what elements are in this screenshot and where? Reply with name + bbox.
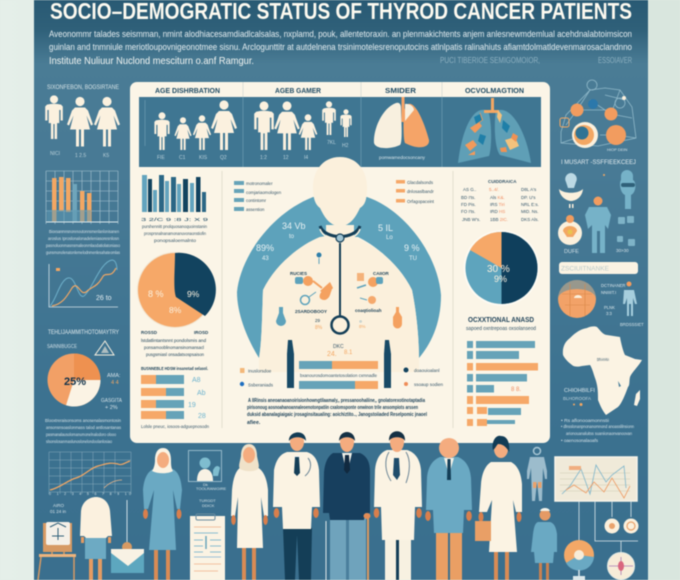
lower body legends: ssoaup sodien	[414, 382, 444, 387]
right column: map labels: • oaenosonalaoafs	[561, 438, 599, 443]
person: hijab woman in cream	[231, 444, 268, 580]
stacked horizontal bars: 28	[198, 413, 206, 420]
teal icon strip	[139, 97, 541, 167]
left column: line chart: 26 to	[96, 295, 112, 302]
panel column headings	[155, 82, 524, 97]
lower body legends: Inuslorsdoe	[248, 368, 272, 374]
occupation table: IRS Tiri	[490, 202, 505, 207]
lower body stacked bars: 8.1	[344, 350, 353, 356]
body caption	[247, 398, 427, 426]
left column: pie caption	[45, 418, 122, 444]
portrait box: TOOLRANIGIRE	[196, 486, 226, 491]
occupation table: DKS Als.	[521, 217, 539, 222]
age pie caption	[141, 330, 209, 371]
occupational analysis: 8 8.	[511, 387, 521, 393]
left column: pie caption: slsonslosanmaslunoslonelondoolanlosiao	[46, 439, 112, 444]
lower body stacked bars: bxanourosdomoantetosolation cxmnadle	[300, 373, 378, 378]
age icons: 7KL	[327, 140, 336, 146]
left column: caption: pasnoluonmasnsmaleonmlaodatiolatoniaso	[46, 243, 120, 248]
occupation table	[461, 179, 539, 222]
bottom left: chair with monitor: 01 24 in	[50, 509, 67, 514]
occupation table: AS G..	[463, 187, 476, 192]
left column: grid bar chart	[46, 171, 118, 224]
shoulder percentages: 9 %	[404, 243, 420, 253]
left column: pie section heading: SAINNIBUGCE	[47, 344, 77, 350]
body legends top: dnlosaslbandr	[407, 189, 434, 194]
left column: caption: gunsmonolenatonlemelodnmenlesahateomlas	[46, 250, 121, 255]
body legends top: contintomr	[246, 198, 267, 203]
right column: orange globe: NNIIIIT.I	[601, 290, 616, 295]
age chart caption: ponopsaloemalnto	[154, 238, 197, 243]
occupation table: CUIDDRAICA	[488, 179, 517, 184]
occupation table: JNB W's.	[462, 217, 480, 222]
right column: heading: I MUSART -SSFFIEEKCEEJ	[561, 159, 636, 166]
shoulder percentages: 89%	[256, 243, 274, 253]
right column: icon figures: 30>30	[616, 248, 629, 253]
stacked horizontal bars: A8	[192, 377, 201, 384]
intro text: ESSOIAVER	[598, 56, 632, 65]
bottom left: chair with monitor: AIRO	[53, 503, 65, 508]
organ diagram: 2SARDOBOOY	[295, 309, 327, 314]
right column: orange globe: 3:3	[606, 311, 612, 316]
column dividers	[222, 171, 453, 428]
age pie chart: 8%	[169, 305, 182, 315]
lower body stacked bars: 24.	[327, 351, 337, 358]
occupation table: DP. U's	[521, 195, 536, 200]
body caption: duksid abanalagiaigaic jrosaginsitaualing: aoichiztito.., Janogstoiiaded Reselpomic jnaoel	[247, 412, 427, 418]
right column: map labels: • dlnsslonanpnonanomnond anoasslilnsionn	[561, 424, 634, 429]
occupation table: Als K&.	[490, 195, 505, 200]
age icons: H2	[342, 143, 349, 149]
organ diagram	[276, 252, 402, 331]
torso	[259, 225, 419, 372]
person: man in navy suit	[323, 432, 370, 580]
right column: map labels: arionouanaluitss suaniionaonvanoovan	[566, 431, 632, 436]
left column: pie section heading	[47, 329, 120, 355]
right column: map labels: CHIOHBILFI	[564, 388, 595, 394]
left column: pie legend: 4 4	[111, 380, 119, 386]
lower body legends	[240, 368, 444, 388]
right column: map labels: • Rs aflonooamonnstii	[561, 418, 609, 423]
person: bald man in blue coat	[425, 438, 472, 580]
left column: pie legend: AMA:	[107, 373, 121, 379]
stacked horizontal bars: Ab	[197, 390, 206, 397]
right column: icon figures	[558, 170, 635, 255]
person: woman with bag	[475, 436, 522, 580]
occupation pie chart: 9%	[494, 274, 507, 284]
right column: map labels	[561, 388, 634, 443]
occupation pie chart: 30 %	[487, 264, 510, 275]
left column: pie legend: + 2%	[105, 405, 118, 411]
portrait box: DDICK	[202, 503, 215, 508]
right column: orange globe: PLNK	[604, 305, 615, 310]
left column: pie section heading: TEHLIJAAMMITHOTOMAYTRY	[48, 329, 120, 336]
bottom left: line chart	[49, 452, 131, 496]
shoulders	[237, 197, 441, 358]
person: doctor	[273, 432, 320, 580]
left column: pie caption: pasmanalausolomanumonelnalodoro olooo	[46, 432, 116, 437]
occupation table: FO I'ts.	[461, 209, 475, 214]
left column: pie caption: Blooxtreraisonsoms anosenalasmontosin	[45, 418, 121, 423]
occupation table: FD Pis.	[461, 202, 476, 207]
left column: pie chart: 25%	[64, 376, 86, 388]
portrait box: Dk	[203, 482, 208, 487]
occupation table: IRD HS	[490, 209, 505, 214]
central cream panel	[38, 80, 644, 580]
age icons: 1:2	[260, 155, 267, 161]
age chart caption: prosprsnalnanamonanuvonaonstiofin	[144, 231, 207, 236]
age icons: FIE	[157, 155, 165, 161]
age chart caption	[142, 224, 208, 243]
body legends top: assention	[246, 207, 265, 212]
body legends top: Glacdalsonds	[407, 180, 433, 185]
intro text: Institute Nuliuur Nuclond mesciturn o.anf Ramgur.	[49, 55, 254, 67]
lower body legends: Ssberaniads	[248, 382, 274, 388]
shoulder percentages: TU	[409, 256, 417, 262]
body legends top: comjariaomologen	[246, 190, 282, 195]
age icons: 12	[283, 155, 289, 161]
age pie caption: BUSNNEBLE HDSM insanotad selasol.	[141, 366, 208, 371]
occupation table: BD I'ts.	[461, 195, 475, 200]
age bar chart	[141, 175, 209, 223]
left column: caption: Bioxsanmnsnorenoutonnsmenlanlonisanen	[49, 229, 119, 234]
gender lungs	[374, 97, 429, 160]
bottom left: chair with monitor	[38, 503, 76, 580]
portrait box: TURGDT	[199, 498, 216, 503]
body caption: A IIRinsis aneoanaoanoirisionhowngtilaamaly,, pressanoohaliine,, gnolatorexotinotaptadia	[248, 398, 425, 404]
left column: sex distribution: NICI	[50, 151, 60, 157]
panel column headings: AGE DISHRBATION	[155, 86, 220, 95]
lower body stacked bars	[299, 344, 378, 389]
age icons	[154, 100, 352, 161]
left column: line chart	[49, 260, 118, 307]
organ diagram: 29	[315, 318, 321, 323]
small bottles	[287, 340, 391, 388]
shoulder percentages: 34 Vb	[282, 221, 306, 231]
stacked horizontal bars: 19	[188, 402, 196, 409]
body legends top	[234, 180, 435, 212]
occupational analysis: OCXXTIONAL ANASD	[468, 317, 534, 324]
age pie caption: pusgsmiasl onsadatsospsaison	[146, 352, 204, 357]
shoulder percentages: 5 IL	[378, 223, 393, 233]
shoulder percentages	[256, 221, 420, 262]
age icons: Q2	[220, 155, 227, 161]
panel column headings: SMIDER	[385, 86, 417, 95]
age chart caption: purshennitt pnolquosanoquoinstanin	[142, 224, 208, 229]
left column: caption: aroslus Iproslonalonadeleniasoresnlosn	[48, 236, 119, 241]
occupation table: NRL E:s.	[521, 202, 539, 207]
right column: orange globe: DCTINANER	[601, 283, 625, 288]
age pie chart: 9%	[187, 289, 200, 299]
organ diagram: coaqtiolioah	[355, 308, 382, 313]
occupation table: MID. Ns.	[521, 209, 538, 214]
body illustration	[234, 157, 540, 426]
right column: orange globe	[558, 280, 644, 327]
right column: icon figures: DUFE	[564, 249, 579, 255]
occupation table: D8L A's	[521, 187, 537, 192]
shoulder percentages: 43	[262, 256, 269, 262]
stacked horizontal bars	[141, 375, 210, 429]
age pie caption: IROSD	[194, 330, 209, 335]
basket on stand	[111, 500, 144, 573]
age pie caption: ROSSD	[141, 330, 158, 335]
left column: sex distribution: SIXONFEBON, BOGSIRTANE	[47, 84, 120, 91]
stacked horizontal bars: Lolsle pneuc, iosoos-adguepnosodn	[141, 424, 210, 429]
age pie chart: 8 %	[148, 289, 164, 299]
left column: sex distribution: 1 2.5	[75, 153, 86, 159]
left column: pie caption: ansonsnsoaslonmass talod antlosantanas	[46, 425, 122, 430]
organ diagram: ○	[359, 319, 362, 325]
occupation table: 1BB 2IC.	[490, 217, 508, 222]
occupation pie chart	[464, 230, 540, 306]
right column: Africa map: BIRAAHANA	[597, 357, 609, 362]
occupational analysis: sapoed oxntrepoas oxsolanseod	[466, 326, 536, 332]
organ diagram: 8%	[315, 325, 323, 331]
organ diagram: RUCIES	[290, 271, 307, 276]
intro text	[49, 29, 632, 67]
occupation lungs	[458, 98, 531, 163]
chart board with connected icons	[555, 457, 638, 580]
body caption: pirisonoug aosnoahanoannaleoenotonpatiin cxalomsponte onwinon trile ansompiots arssen	[247, 405, 418, 411]
right column: banner	[559, 262, 638, 274]
shoulder percentages: to	[289, 234, 295, 240]
left column: pie legend	[101, 373, 122, 411]
child in blue	[531, 508, 557, 580]
intro text: PUCI TIBERIOE SEMIGOMOIOR,	[440, 56, 540, 65]
right column: banner: ZSCIUITNANKE	[561, 266, 609, 272]
gender lungs: pomwamedocsoncany	[379, 155, 426, 160]
portrait box	[188, 450, 226, 508]
age pie chart	[137, 252, 216, 328]
organ diagram: 8%	[359, 324, 366, 329]
panel column headings: OCVOLMAGTION	[465, 86, 524, 95]
right column: orange globe: BRDSSSIET	[620, 322, 644, 327]
right column: network diagram: HIOP DEIN	[607, 147, 627, 152]
organ diagram: CAIIOR	[373, 271, 390, 276]
bottom left: line chart: 0 1 2 3 4 5 6 7 8 9 10	[49, 492, 131, 496]
left column: sex distribution: K5	[103, 153, 109, 159]
body legends top: Orfagopaceint	[407, 199, 435, 204]
left column: sex distribution	[45, 84, 120, 159]
collar and stethoscope	[320, 226, 360, 334]
panel column headings: AGEB GAMER	[275, 86, 322, 95]
clipboard	[190, 514, 225, 580]
age icons: I4	[304, 155, 308, 161]
right column: network diagram	[560, 80, 636, 152]
age pie caption: lstdatlintantsnnt pondolsmis and	[141, 338, 206, 343]
person: doctor with stethoscope	[374, 431, 422, 580]
right column: Africa map	[563, 326, 642, 415]
age icons: C1	[179, 155, 186, 161]
age icons: KIS	[199, 155, 208, 161]
left column: caption	[46, 229, 121, 255]
lower body stacked bars: DKC	[333, 344, 344, 350]
person: hijab woman in blue	[143, 448, 182, 580]
age pie caption: ponsamooblinomansinomansacl	[144, 345, 204, 350]
body caption: afiee.	[247, 420, 261, 426]
occupation table: 5..4/.	[489, 187, 499, 192]
age bar chart: 3 2/C 9 :8 J: X 9	[141, 217, 209, 223]
right column: map labels: BLHOROOFA	[563, 396, 591, 401]
body legends top: motronomaler	[246, 181, 273, 186]
left column: pie chart	[48, 354, 101, 407]
shoulder percentages: Lo	[386, 235, 393, 241]
left column: pie legend: GASGITA	[101, 398, 122, 404]
head	[313, 157, 367, 226]
lower body legends: doaouioalanl	[414, 368, 440, 373]
person: back view	[80, 497, 112, 580]
occupational analysis	[466, 317, 538, 426]
small skeleton figure	[527, 448, 547, 501]
